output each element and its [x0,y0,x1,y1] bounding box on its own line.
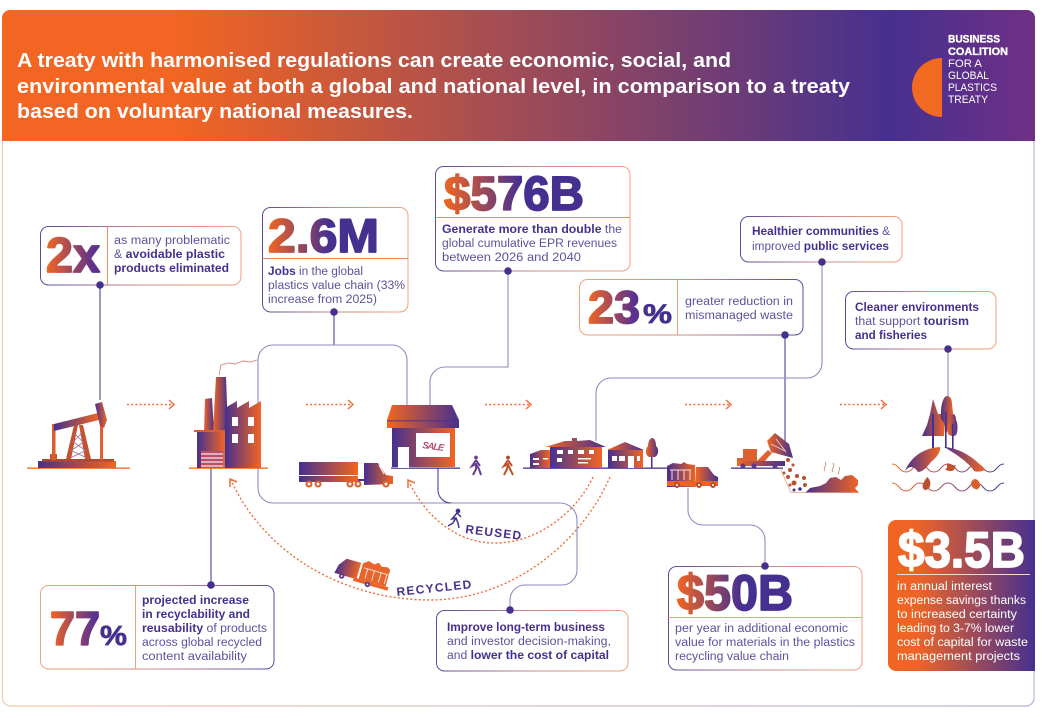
card text [114,235,230,275]
waves [892,464,1004,472]
card text: global cumulative EPR revenues [442,238,617,250]
card text [447,622,611,662]
card: healthier communities [740,216,902,262]
logo wordmark: FOR A [948,58,983,70]
falling waste [782,458,807,492]
card text: Jobs in the global [268,266,363,278]
card outline [40,226,241,285]
icon: shop [387,405,460,469]
headline: based on voluntary national measures. [17,101,413,123]
highlight text: management projects [897,651,1020,663]
icon: oil pump [27,402,130,469]
card text: Generate more than double the [442,224,622,236]
card text [675,623,855,663]
card text: Cleaner environments [855,302,979,314]
highlight text: expense savings thanks [897,595,1026,607]
icon: waste truck [667,462,718,487]
card text: plastics value chain (33% [268,280,405,292]
header background [2,10,1035,141]
trees [922,399,945,436]
card text: across global recycled [142,637,262,649]
card text: and fisheries [855,330,927,342]
shop sign: SALE [422,440,446,454]
logo wordmark: COALITION [948,46,1008,58]
card: $3.5B highlight [888,520,1035,671]
card text: value for materials in the plastics [675,637,855,649]
card outline [436,610,628,671]
card outline [436,166,630,271]
card: $50B [668,565,862,670]
factory smoke [219,360,257,375]
highlight text: leading to 3-7% lower [897,623,1014,635]
card: 77% [40,586,274,669]
flow arrows [127,400,886,409]
card text [268,266,405,306]
card text: and investor decision-making, [447,636,611,648]
card outline [262,208,408,312]
card outline [740,216,902,262]
card text [442,224,622,264]
card text [142,595,267,663]
card: 77%: % [100,620,127,651]
logo wordmark: BUSINESS [948,34,1000,46]
card outline [846,292,996,349]
headline: A treaty with harmonised regulations can create economic, social, and [17,50,731,72]
island [905,447,940,472]
card text: products eliminated [114,263,229,275]
icon: roadside tree [646,438,658,468]
card outline [40,586,274,669]
card text: recycling value chain [675,651,789,663]
label: reused: REUSED [465,522,522,543]
icon: clean environment [892,396,1004,491]
card outline [668,566,862,670]
logo half circle [912,58,942,117]
card text: Improve long-term business [447,622,605,634]
card text: greater reduction in [685,296,793,308]
highlight text: to increased certainty [897,609,1017,621]
logo wordmark: PLASTICS [948,82,997,94]
highlight background [888,520,1035,671]
reuse loop arrow [408,477,593,543]
card text: mismanaged waste [685,310,793,322]
header banner [2,10,1035,141]
outer frame [2,141,1034,706]
card: 23% [580,280,803,335]
logo [912,34,1008,117]
waste pile [805,475,859,493]
icon: recycling truck [333,552,394,592]
card text [855,302,979,342]
icon: tipper truck and dump [731,433,859,493]
logo wordmark [948,34,1008,106]
stat: $3.5B: $3.5B [898,522,1025,578]
card text: improved public services [752,241,889,253]
card text: and lower the cost of capital [447,650,609,662]
stat: 23%: 23 [588,282,640,333]
stat: $576B: $576B [444,168,584,221]
icon: factory [189,360,268,469]
recycle loop arrow [230,477,610,600]
card text: in recyclability and [142,609,250,621]
icon: houses [523,438,668,469]
highlight text: in annual interest [897,581,993,593]
card outline [580,280,803,335]
factory windows [232,417,254,443]
card: $576B EPR [436,166,630,271]
fish and rocks [945,463,956,471]
card text: that support tourism [855,316,969,328]
card: 2x [40,226,241,285]
icon: shoppers [472,456,513,475]
card text [685,296,793,322]
headline: environmental value at both a global and national level, in comparison to a treaty [17,76,851,98]
logo wordmark: GLOBAL [948,70,989,82]
card text: content availability [142,651,247,663]
card text: Healthier communities & [752,226,890,238]
connector lines [100,262,948,610]
card text [752,226,890,253]
headline [17,50,851,123]
icon: recycling walker [448,509,461,528]
highlight text: cost of capital for waste [897,637,1028,649]
stat: 77%: 77 [50,602,100,655]
stat: 2x: 2x [46,229,100,283]
card text: increase from 2025) [268,294,377,306]
card text: per year in additional economic [675,623,848,635]
card text: projected increase [142,595,249,607]
card text: reusability of products [142,623,267,635]
stat: 2.6M: 2.6M [268,209,379,262]
logo wordmark: TREATY [948,94,989,106]
card: 23%: % [643,299,672,329]
factory door [201,451,223,468]
card text: between 2026 and 2040 [442,252,581,264]
card: improve decision-making [436,610,628,671]
card: 2.6M jobs [262,208,408,312]
card text: as many problematic [114,235,230,247]
highlight text [897,581,1028,663]
card: cleaner environments [846,292,996,349]
connector dots [96,258,952,614]
card text: & avoidable plastic [114,249,226,261]
label: recycled: RECYCLED [396,577,472,599]
icon: lorry [299,462,393,486]
stat: $50B: $50B [677,565,793,621]
